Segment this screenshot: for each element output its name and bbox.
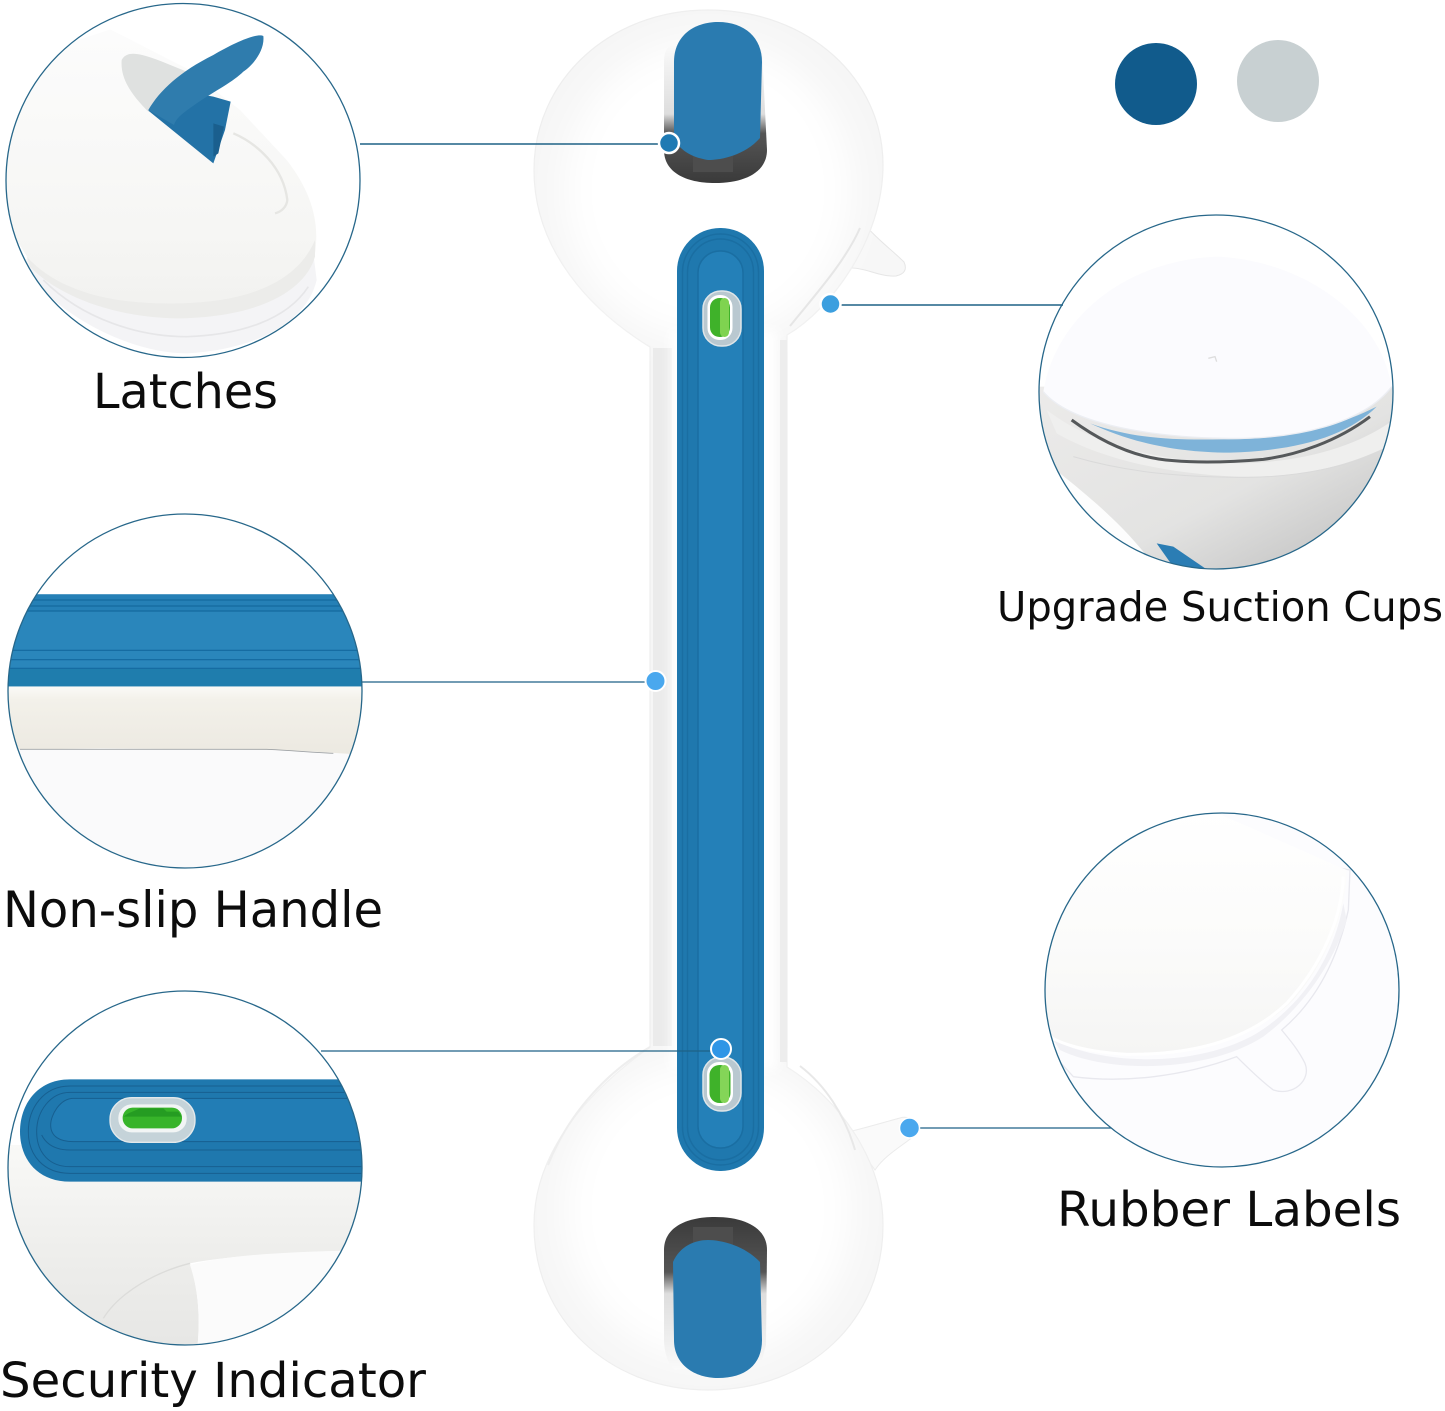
leader line: security indicator <box>321 1050 712 1052</box>
bottom security indicator <box>703 1057 741 1111</box>
circle outline: rubber labels <box>1045 813 1399 1167</box>
panel: non-slip handle detail <box>8 594 362 754</box>
blue latch block <box>148 90 231 163</box>
label: Non-slip Handle: Non-slip Handle <box>3 881 383 939</box>
label: Security Indicator: Security Indicator <box>0 1353 426 1409</box>
colour swatch: grey <box>1237 40 1319 122</box>
leader line: non-slip handle <box>362 681 648 683</box>
glass indicator <box>110 1098 195 1142</box>
circle outline: security indicator <box>8 991 362 1345</box>
marker: non-slip handle <box>646 671 666 691</box>
leader line: rubber labels <box>915 1127 1112 1129</box>
body contour <box>103 1263 190 1318</box>
green level <box>123 1108 182 1128</box>
handle edge line <box>20 749 333 753</box>
centre mark <box>1208 357 1217 362</box>
circle outline: latches <box>6 4 360 358</box>
label: Latches: Latches <box>93 364 278 420</box>
top latch slot <box>664 45 767 183</box>
lower cut-out <box>190 1252 314 1278</box>
colour swatch: blue <box>1115 43 1197 125</box>
recess <box>122 54 187 112</box>
lower white area <box>0 750 370 875</box>
main product: suction grab bar <box>534 10 916 1390</box>
handle left shaded edge <box>653 348 672 1046</box>
body <box>7 157 316 259</box>
bottom latch slot <box>664 1217 767 1370</box>
leader line: latches <box>360 143 660 145</box>
blue non-slip grip strip <box>677 228 764 1171</box>
label: Upgrade Suction Cups: Upgrade Suction Cups <box>997 583 1443 631</box>
marker: security indicator <box>711 1039 731 1059</box>
ridge lines <box>0 600 370 668</box>
upper suction tab <box>852 226 905 276</box>
bottom latch blue lever <box>673 1240 762 1378</box>
marker: suction cups <box>820 294 840 314</box>
white wedge left <box>1060 474 1144 553</box>
marker: rubber labels <box>900 1118 920 1138</box>
blue strip <box>20 1079 370 1182</box>
top security indicator <box>703 291 741 346</box>
panel: security indicator detail <box>9 1079 362 1344</box>
blue latch blade <box>148 35 263 125</box>
label: Rubber Labels: Rubber Labels <box>1057 1182 1401 1238</box>
dark gasket band <box>1072 417 1370 462</box>
circle outline: suction cups <box>1039 215 1393 569</box>
handle right shaded edge <box>780 340 787 1062</box>
product silhouette: discs and neck <box>534 10 883 1390</box>
flange and pull tab <box>1062 868 1350 1092</box>
bottom latch inner clip <box>693 1227 733 1245</box>
blue strip <box>0 594 370 686</box>
disc highlights <box>563 40 853 340</box>
cup top surface <box>1044 386 1391 438</box>
leader line: suction cups <box>838 304 1063 306</box>
top latch inner clip <box>693 155 733 172</box>
inner flange band <box>1053 903 1347 1066</box>
lower suction tab <box>848 1117 916 1170</box>
body rim shading <box>27 240 315 318</box>
panel: suction cup detail <box>1040 356 1392 568</box>
disc rim <box>1052 1000 1290 1054</box>
suction base <box>20 253 317 353</box>
body inner ridge <box>233 133 287 213</box>
cup lip <box>1043 387 1392 438</box>
top latch blue lever <box>674 22 762 160</box>
neck rim highlights <box>790 228 860 326</box>
marker: latches <box>659 133 679 153</box>
handle white face <box>671 330 777 1070</box>
cream handle section <box>0 686 370 755</box>
panel: rubber labels detail <box>1046 868 1351 1128</box>
body rim band <box>1108 423 1390 476</box>
grey handle body <box>0 1145 370 1355</box>
circle outline: non-slip handle <box>8 514 362 868</box>
body under cup <box>1040 386 1392 568</box>
panel: latches detail <box>0 29 317 353</box>
suction disc body <box>1048 830 1346 1052</box>
blue strip ridges <box>28 1086 370 1173</box>
blue edge of cup <box>1090 407 1377 453</box>
